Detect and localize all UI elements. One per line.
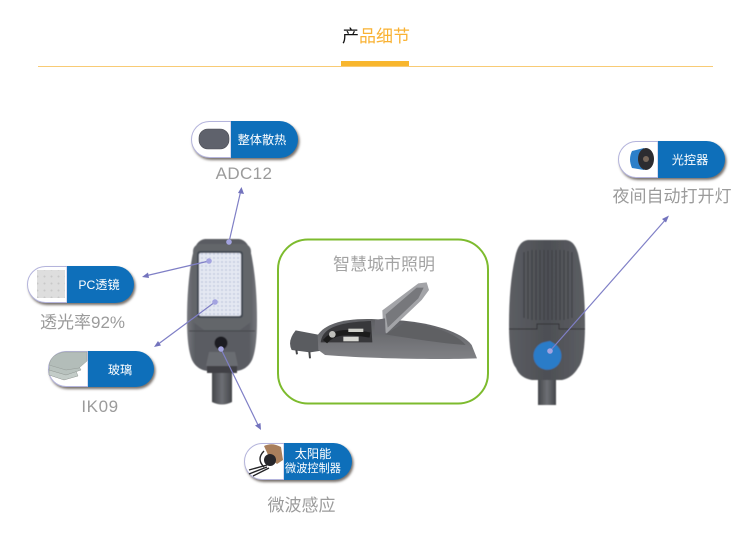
pill: PC透镜	[28, 266, 136, 305]
arrow: microwave sensor	[218, 346, 261, 430]
caption: ADC12: ADC12	[216, 164, 272, 183]
lamp body	[187, 239, 257, 371]
caption: 透光率92%: 透光率92%	[40, 313, 125, 332]
icon: glass sheets	[49, 352, 87, 380]
arrow: glass	[154, 299, 218, 347]
icon: photocell	[630, 148, 654, 170]
pill: 光控器: 光控器	[672, 153, 708, 167]
caption: IK09: IK09	[81, 397, 119, 416]
caption: 夜间自动打开灯: 夜间自动打开灯	[612, 187, 732, 206]
title: 品细节	[359, 27, 410, 46]
pill: 太阳能微波控制器	[244, 443, 354, 482]
icon: microwave controller	[249, 444, 283, 476]
lamp mounting stem	[538, 378, 556, 405]
title underline	[38, 61, 713, 67]
side view of open lamp	[290, 282, 477, 359]
title: 产	[342, 27, 359, 46]
right street lamp back view	[509, 240, 585, 405]
lamp body	[509, 240, 585, 380]
pill: 整体散热: 整体散热	[238, 132, 286, 147]
pill: 玻璃	[49, 351, 156, 389]
pill label	[285, 446, 341, 475]
lamp lens panel	[197, 251, 243, 318]
pill: PC透镜: PC透镜	[78, 277, 120, 292]
arrow: light control	[547, 216, 669, 354]
pill: 整体散热	[192, 121, 300, 160]
panel: smart city lighting	[278, 240, 488, 404]
arrow: PC lens	[142, 258, 212, 278]
arrow: heat dissipation	[226, 187, 244, 245]
pill: 光控器	[618, 141, 726, 180]
left street lamp front view	[187, 239, 257, 404]
icon: PC lens	[37, 270, 65, 298]
blue sensor	[533, 341, 561, 370]
lamp mounting stem	[212, 368, 232, 404]
caption: 微波感应: 微波感应	[268, 496, 336, 515]
pill: 玻璃: 玻璃	[108, 363, 132, 377]
icon: housing	[199, 129, 229, 149]
pill label: 太阳能	[295, 446, 331, 461]
cooling fins	[524, 250, 572, 320]
pill label: 微波控制器	[285, 461, 341, 475]
panel heading: 智慧城市照明	[333, 255, 435, 274]
lamp sensor	[214, 336, 228, 350]
